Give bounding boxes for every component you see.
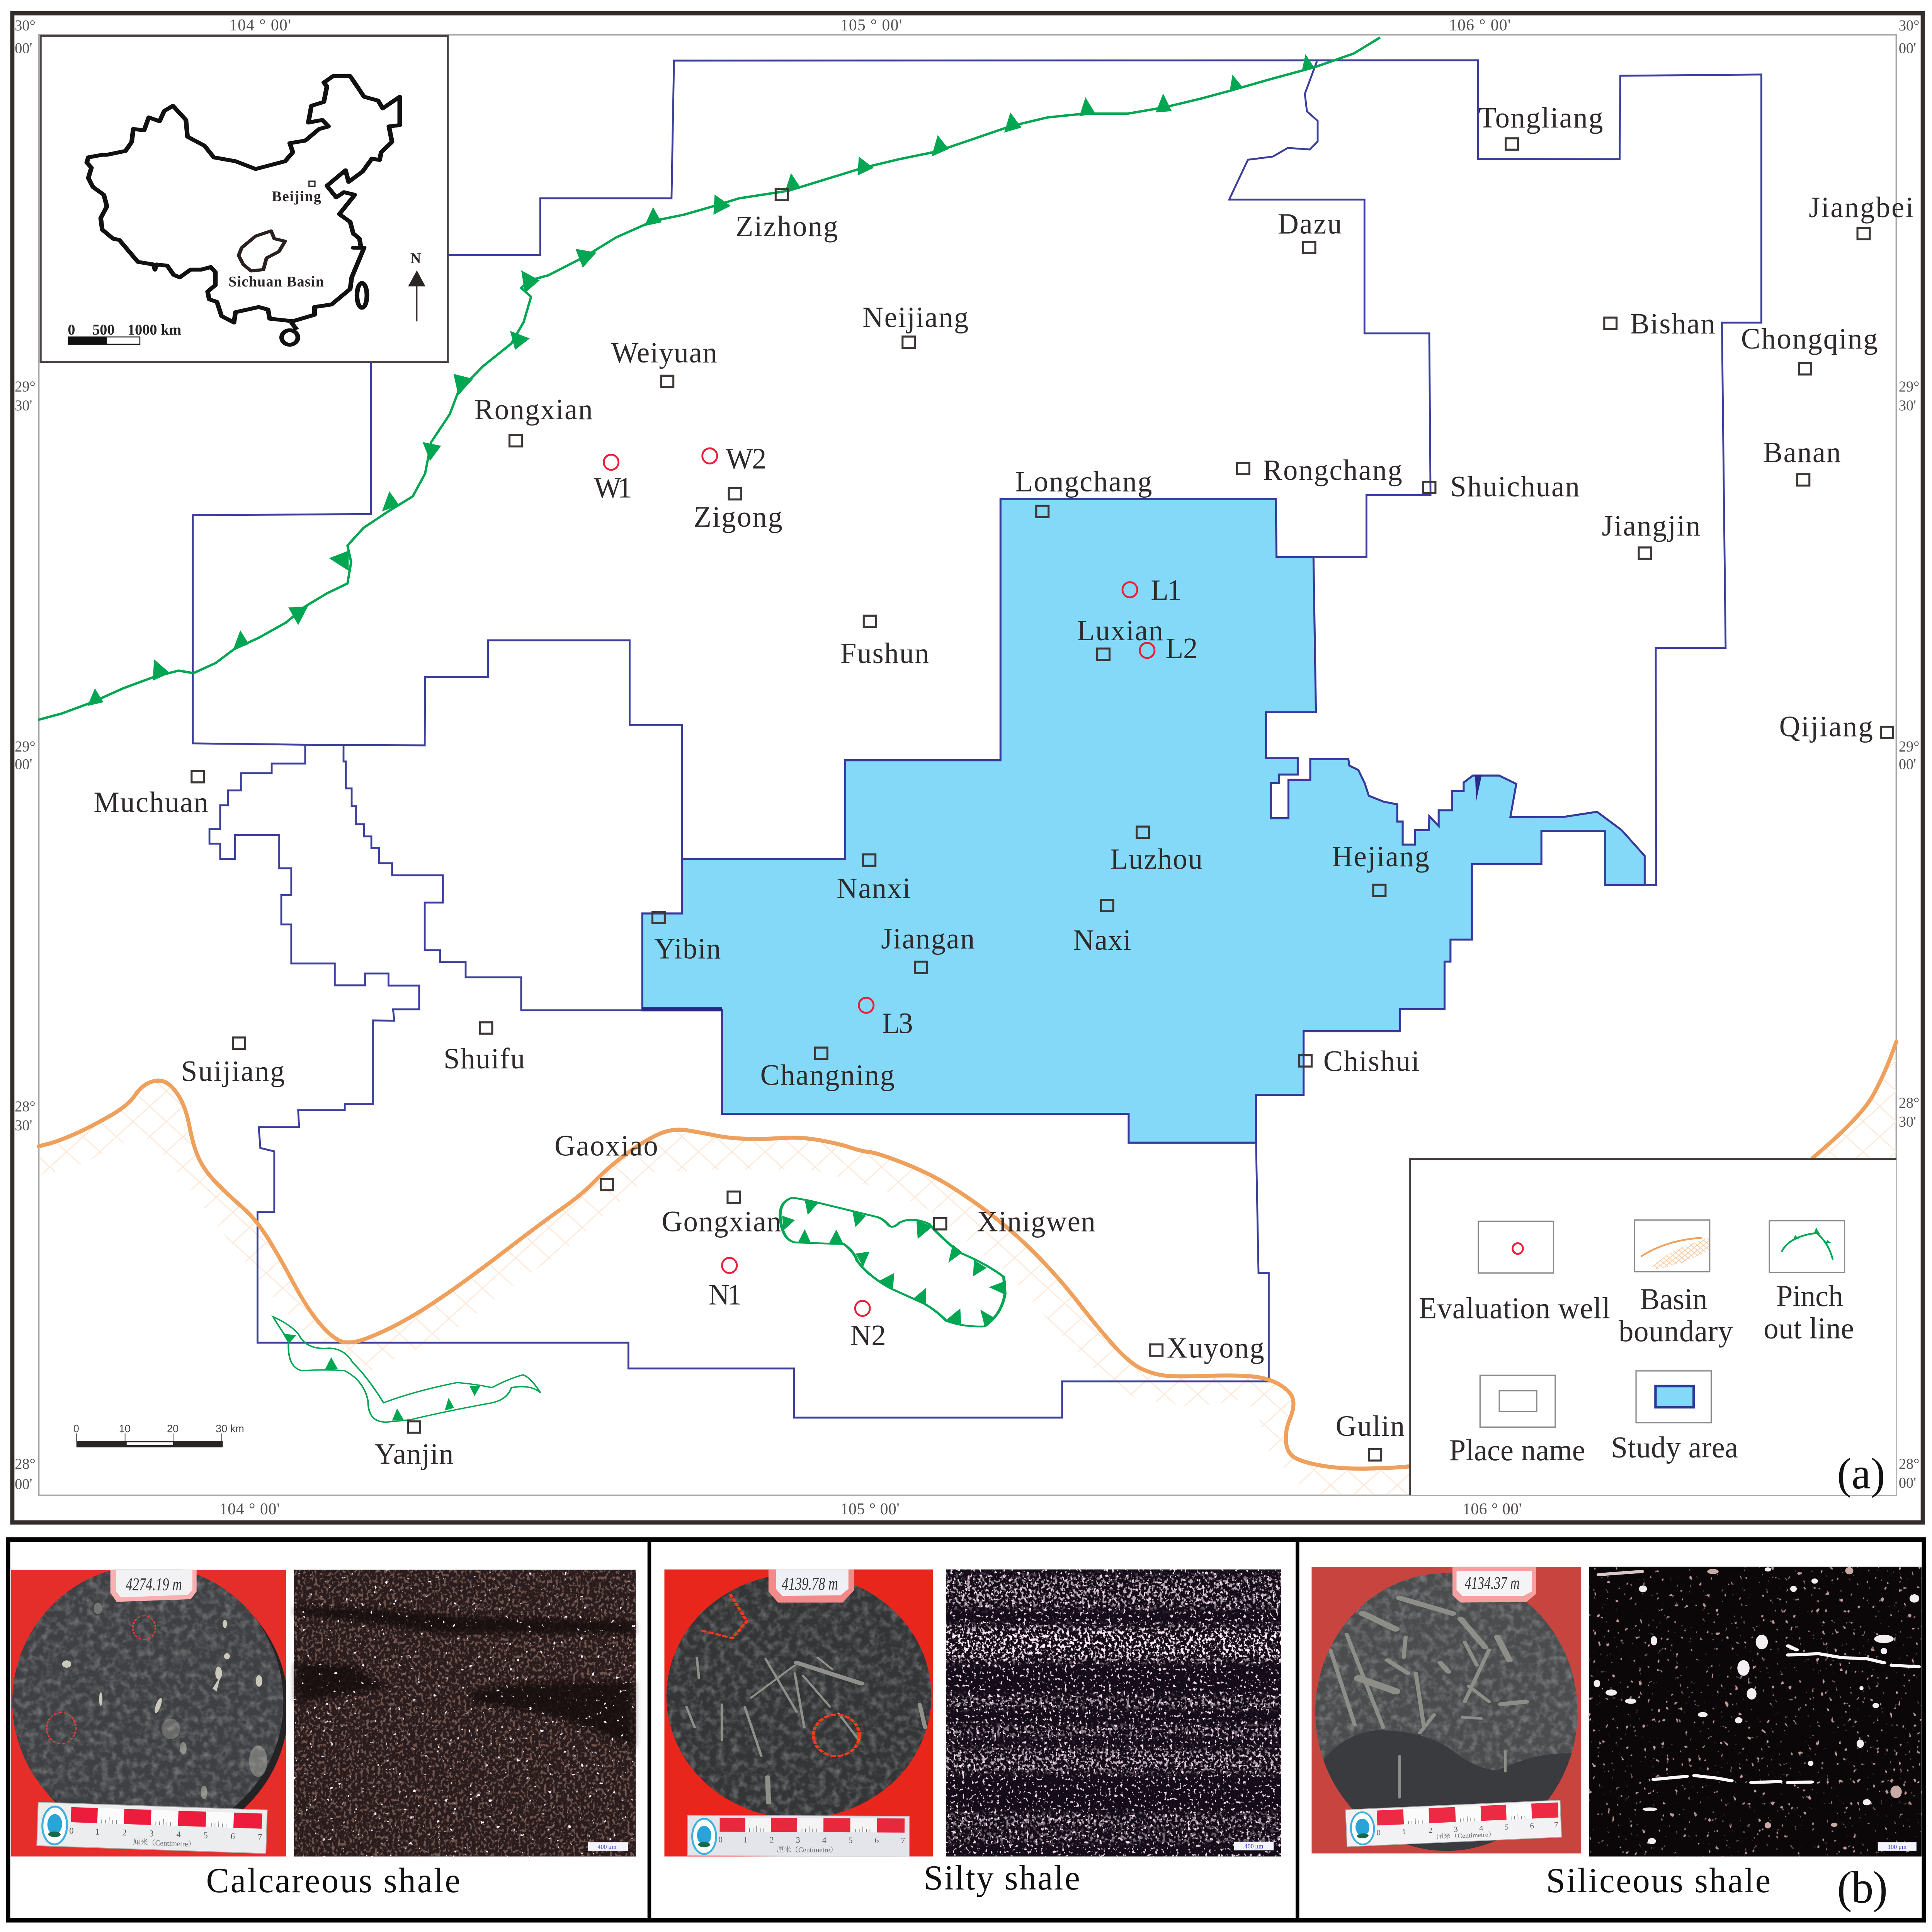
well: N2: [850, 1301, 886, 1352]
place: Yibin: [652, 912, 721, 965]
place: Shuifu: Shuifu: [444, 1042, 525, 1075]
core photo: siliceous shale: [1311, 1567, 1581, 1862]
place: Luzhou: [1110, 827, 1202, 876]
micro bright streaks: [1599, 1571, 1918, 1782]
rock ruler: 7: [901, 1836, 905, 1845]
graticule labels: left: 28°: [15, 1098, 36, 1115]
graticule labels: right: 29°: [1899, 738, 1919, 755]
legend panel: [1410, 1159, 1896, 1498]
basin boundary line: [39, 1042, 1896, 1469]
rock ruler: [37, 1802, 267, 1854]
legend: basin boundary: Basin: [1640, 1282, 1708, 1316]
place: Muchuan: Muchuan: [94, 786, 208, 819]
graticule labels: left: 29°: [15, 378, 36, 395]
panel: shale samples (b): [8, 1539, 1924, 1920]
place: Hejiang: Hejiang: [1332, 840, 1429, 873]
core dark lower lobe: [1314, 1730, 1578, 1862]
core photo: silty shale: [664, 1570, 933, 1857]
legend: pinch out line: [1764, 1221, 1854, 1345]
graticule labels: left: 30°: [15, 17, 36, 34]
inset: north arrow: [408, 250, 425, 321]
map inner neatline: [39, 35, 1896, 1495]
place: Nanxi: [837, 854, 911, 905]
graticule labels: right: 30': [1899, 1113, 1916, 1130]
rock ruler: 5: [849, 1836, 853, 1845]
study area: [642, 499, 1645, 1143]
place: Qijiang: Qijiang: [1779, 710, 1873, 743]
place: Jiangjin: Jiangjin: [1602, 509, 1701, 542]
rock ruler: 7: [258, 1832, 262, 1842]
graticule labels: right: 30°: [1899, 17, 1919, 34]
rock ruler: 4: [176, 1829, 181, 1839]
place: Longchang: [1015, 465, 1152, 517]
inset: China locator map: [41, 36, 448, 362]
place: Weiyuan: [611, 336, 717, 387]
rock ruler: 厘米（Centimetre）: [133, 1838, 196, 1849]
inset: scale bar: 1000 km: [128, 321, 181, 338]
place: Yanjin: Yanjin: [374, 1437, 453, 1470]
micro scale bar: 400 μm: [1245, 1843, 1264, 1850]
caption: siliceous shale: Siliceous shale: [1546, 1861, 1770, 1900]
well: L3: [859, 998, 913, 1040]
scale bar: main map: [73, 1422, 244, 1447]
panel tag (b): (b): [1837, 1862, 1888, 1913]
inset: north arrow: N: [410, 250, 421, 267]
rock ruler: 0: [69, 1826, 74, 1836]
place: Neijiang: Neijiang: [862, 301, 968, 334]
scale bar: main map: 10: [119, 1422, 131, 1434]
well: L2: [1140, 632, 1197, 665]
graticule labels: right: 30': [1899, 397, 1916, 414]
place: Yibin: Yibin: [654, 932, 721, 965]
pinch out line: Yanjin outline: [273, 1317, 541, 1422]
place: Tongliang: [1479, 101, 1603, 150]
depth tag: 4134.37 m: [1465, 1573, 1520, 1593]
core fossil streaks: [1330, 1598, 1526, 1798]
rock ruler: 7: [1554, 1821, 1558, 1829]
inset: China outline: [87, 76, 400, 345]
caption: calcareous shale: Calcareous shale: [206, 1861, 460, 1900]
well: N2: N2: [850, 1319, 886, 1352]
micro scale bar: [1878, 1842, 1917, 1851]
graticule labels: left: 30': [15, 1117, 32, 1134]
inset: scale bar: [68, 321, 181, 344]
place: Nanxi: Nanxi: [837, 872, 911, 905]
place: Jiangjin: [1602, 509, 1701, 559]
core sample drill circles: [701, 1594, 859, 1756]
rock ruler: [687, 1815, 909, 1857]
micro scale bar: [588, 1842, 628, 1851]
place: Naxi: Naxi: [1073, 923, 1131, 956]
place: Rongchang: Rongchang: [1263, 454, 1402, 486]
study area dark south-west edge: [642, 1007, 722, 1011]
place: Hejiang: [1332, 840, 1429, 896]
graticule labels: right: 29°: [1899, 378, 1919, 395]
place: Changning: Changning: [760, 1059, 895, 1092]
place: Chishui: Chishui: [1323, 1045, 1419, 1078]
graticule labels: bottom: 104 ° 00': [219, 1500, 280, 1518]
place: Dazu: Dazu: [1278, 207, 1342, 240]
rock ruler: 厘米（Centimetre）: [1437, 1831, 1495, 1840]
place: Fushun: Fushun: [840, 637, 929, 670]
place: Gaoxiao: [554, 1129, 658, 1190]
well: W2: [702, 442, 766, 475]
rock ruler: 6: [231, 1831, 235, 1841]
micro scale bar: 400 μm: [598, 1844, 617, 1850]
graticule labels: top: 105 ° 00': [840, 16, 902, 34]
well: W1: [594, 455, 632, 504]
place: Banan: [1763, 436, 1841, 486]
micro scale bar: 100 μm: [1888, 1844, 1906, 1850]
place: Bishan: Bishan: [1630, 307, 1715, 340]
well: W1: W1: [594, 471, 632, 504]
rock ruler: [1345, 1800, 1561, 1847]
rock ruler: 1: [95, 1827, 100, 1837]
place: Muchuan: [94, 771, 208, 819]
legend: pinch out line: Pinch: [1776, 1279, 1843, 1313]
legend: pinch out line: out line: [1764, 1311, 1854, 1345]
place: Naxi: [1073, 900, 1131, 956]
place: Longchang: Longchang: [1015, 465, 1152, 498]
graticule labels: left: 00': [15, 40, 32, 56]
place: Rongxian: [474, 393, 593, 446]
legend: basin boundary: boundary: [1619, 1314, 1733, 1348]
place: Suijiang: Suijiang: [181, 1055, 285, 1088]
rock ruler: 5: [1504, 1823, 1509, 1832]
place: Banan: Banan: [1763, 436, 1841, 469]
panel tag (a): (a): [1837, 1449, 1885, 1498]
legend: basin boundary: [1619, 1220, 1733, 1348]
inset: scale bar: 500: [92, 321, 115, 338]
place: Tongliang: Tongliang: [1479, 101, 1603, 134]
well: L3: L3: [882, 1007, 913, 1040]
well: L1: L1: [1151, 574, 1182, 607]
graticule labels: bottom: [219, 1500, 1522, 1518]
rock ruler: 6: [875, 1836, 879, 1845]
inset: Beijing: Beijing: [272, 188, 321, 205]
place: Weiyuan: Weiyuan: [611, 336, 717, 369]
place: Gulin: [1336, 1410, 1405, 1461]
scale bar: main map: 20: [167, 1422, 179, 1434]
rock ruler: 2: [1428, 1827, 1433, 1835]
graticule labels: bottom: 106 ° 00': [1463, 1500, 1522, 1518]
place: Gulin: Gulin: [1336, 1410, 1405, 1442]
place: Fushun: [840, 616, 929, 670]
rock ruler: 1: [743, 1835, 748, 1844]
depth tag: [769, 1570, 854, 1603]
samples outer frame: [8, 1539, 1924, 1920]
microscope photo: siliceous shale: [1589, 1567, 1922, 1857]
caption: silty shale: Silty shale: [924, 1858, 1080, 1897]
well: L1: [1122, 574, 1182, 607]
place: Zizhong: [736, 189, 838, 243]
inset: Sichuan Basin label: Sichuan Basin: [228, 273, 324, 290]
graticule labels: top: 106 ° 00': [1449, 16, 1510, 34]
place: Shuichuan: Shuichuan: [1450, 470, 1580, 503]
graticule labels: left: 00': [15, 756, 32, 773]
graticule labels: right: 28°: [1899, 1094, 1919, 1111]
legend: study area: Study area: [1611, 1430, 1738, 1464]
place: Gaoxiao: Gaoxiao: [554, 1129, 658, 1162]
well: N1: [709, 1258, 742, 1311]
graticule labels: right: [1899, 17, 1919, 1491]
graticule labels: left: 00': [15, 1476, 32, 1493]
legend: study area: [1611, 1371, 1738, 1464]
pinch out line: north: [38, 37, 1380, 720]
inset: scale bar: 0: [68, 321, 75, 338]
place: Chongqing: [1741, 322, 1878, 374]
core photo: calcareous shale: [11, 1565, 288, 1857]
place: Rongxian: Rongxian: [474, 393, 593, 426]
place: Xuyong: Xuyong: [1167, 1332, 1264, 1364]
graticule labels: top: 104 ° 00': [229, 16, 291, 34]
place: Neijiang: [862, 301, 968, 348]
rock ruler: 3: [796, 1835, 800, 1845]
rock ruler: 6: [1530, 1822, 1534, 1830]
place: Jiangbei: [1809, 191, 1913, 239]
graticule labels: left: 30': [15, 397, 32, 414]
rock ruler: 厘米（Centimetre）: [777, 1846, 837, 1854]
rock ruler: 3: [149, 1828, 154, 1838]
place: Xinigwen: Xinigwen: [977, 1205, 1095, 1238]
legend: evaluation well: Evaluation well: [1419, 1291, 1610, 1325]
graticule labels: top: [229, 16, 1510, 34]
rock ruler: 1: [1402, 1828, 1406, 1836]
pinch out line: central closed outline: [780, 1197, 1006, 1327]
well: L2: L2: [1166, 632, 1197, 665]
rock ruler: 3: [1454, 1825, 1458, 1833]
depth tag: [1452, 1567, 1536, 1603]
rock ruler: 0: [1376, 1829, 1381, 1837]
microscope photo: calcareous shale: [294, 1570, 636, 1857]
graticule labels: bottom: 105 ° 00': [840, 1500, 900, 1518]
depth tag: [111, 1570, 197, 1602]
graticule labels: left: 29°: [15, 738, 36, 755]
micro bright grains: [1594, 1567, 1919, 1844]
place: Jiangan: [881, 922, 975, 973]
block boundary lines: [193, 60, 1761, 1418]
legend: place name: [1449, 1375, 1585, 1467]
place: Luzhou: Luzhou: [1110, 843, 1202, 876]
rock ruler: 2: [122, 1828, 127, 1837]
place: Gongxian: Gongxian: [662, 1205, 781, 1238]
samples dividers: [649, 1539, 1298, 1920]
place: Zigong: Zigong: [694, 500, 782, 533]
scale bar: main map: 30 km: [216, 1422, 244, 1434]
graticule labels: left: [15, 17, 36, 1493]
basin boundary hatching: [39, 1042, 1896, 1494]
place: Yanjin: [374, 1422, 453, 1470]
scale bar: main map: 0: [73, 1422, 79, 1434]
graticule labels: right: 00': [1899, 756, 1916, 773]
panel: map (a): [12, 13, 1923, 1522]
well: N1: N1: [709, 1278, 742, 1311]
rock ruler: 5: [203, 1830, 208, 1840]
graticule labels: right: 00': [1899, 40, 1916, 56]
core fossil streaks: [686, 1658, 925, 1803]
place: Jiangan: Jiangan: [881, 922, 975, 955]
depth tag: 4139.78 m: [782, 1573, 838, 1594]
graticule labels: left: 28°: [15, 1456, 36, 1472]
place: Shuifu: [444, 1022, 525, 1075]
well: W2: W2: [726, 442, 766, 475]
place: Suijiang: [181, 1037, 285, 1088]
core sample marks: [62, 1603, 267, 1799]
depth tag: 4274.19 m: [126, 1574, 182, 1594]
map outer frame: [12, 13, 1923, 1522]
study area dark wedge: [1475, 775, 1482, 801]
rock ruler: 0: [718, 1835, 723, 1844]
micro scale bar: [1234, 1842, 1274, 1850]
place: Chongqing: Chongqing: [1741, 322, 1878, 355]
rock ruler: 4: [1479, 1824, 1483, 1832]
core sample drill circles: [47, 1616, 155, 1744]
legend: evaluation well: [1419, 1221, 1610, 1325]
rock ruler: 2: [770, 1835, 774, 1845]
place: Jiangbei: Jiangbei: [1809, 191, 1913, 224]
graticule labels: right: 28°: [1899, 1456, 1919, 1472]
place: Luxian: Luxian: [1077, 614, 1163, 647]
graticule labels: right: 00': [1899, 1475, 1916, 1491]
microscope photo: silty shale: [946, 1570, 1281, 1857]
legend: place name: Place name: [1449, 1433, 1585, 1467]
place: Zizhong: Zizhong: [736, 210, 838, 243]
rock ruler: 4: [822, 1835, 827, 1845]
